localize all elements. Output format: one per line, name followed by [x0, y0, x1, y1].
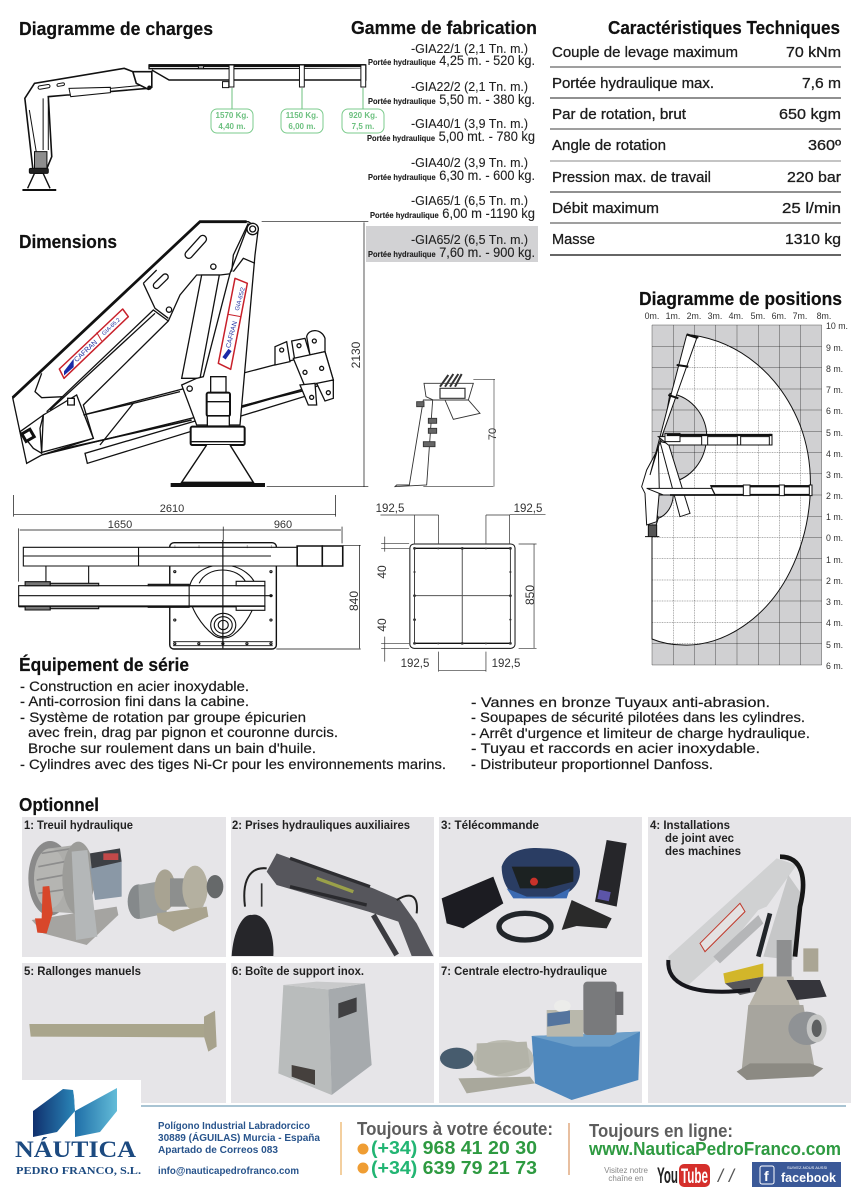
chart axis labels: [645, 311, 848, 671]
load callouts: [211, 88, 384, 133]
online block: chaîne en: [608, 1174, 644, 1183]
heading: Diagramme de positions: Diagramme de positions: [639, 288, 842, 309]
label: CAFRAN column: GIA-65/2: [235, 286, 247, 312]
facebook badge: facebook: [781, 1170, 837, 1185]
label: CAFRAN jib: [59, 309, 128, 378]
technical specs table: 1310 kg: [785, 232, 841, 248]
technical specs table: Portée hydraulique max.: [552, 76, 714, 92]
address: info@nauticapedrofranco.com: [158, 1166, 299, 1177]
chart axis labels: 5 m.: [826, 640, 843, 650]
large crane drawing: [13, 222, 368, 487]
chart grid and envelope: [645, 325, 822, 665]
range list: Gamme de fabrication: Portée hydraulique 6,30 m. - 600 kg.: [368, 167, 535, 183]
dimension labels: 192,5: [492, 658, 520, 670]
online block: Visitez notre: [604, 1166, 648, 1175]
standard equipment list left: avec frein, drag par pignon et couronne durcis.: [28, 725, 338, 740]
chart axis labels: 3m.: [708, 311, 722, 321]
crane positions: [642, 334, 812, 537]
bolt plan: [380, 514, 546, 672]
panel 7: electro-hydraulic unit: 7: Centrale electro-hydraulique: [441, 966, 607, 978]
dimension labels: [108, 428, 542, 670]
range list: Gamme de fabrication: -GIA40/1 (3,9 Tn. m.): [411, 116, 528, 131]
panel 7: electro-hydraulic unit: [439, 963, 642, 1103]
standard equipment list left: [20, 679, 446, 772]
load diagram crane: [22, 65, 384, 190]
chart axis labels: 1m.: [666, 311, 680, 321]
technical specs table: Pression max. de travail: [552, 170, 711, 186]
panel 2: auxiliary hydraulics: [231, 817, 434, 957]
standard equipment list right: - Vannes en bronze Tuyaux anti-abrasion.: [471, 695, 770, 710]
technical specs table: Angle de rotation: [552, 138, 666, 154]
photo: remote kit: [442, 840, 627, 940]
chart axis labels: 4 m.: [826, 618, 843, 628]
technical specs table: 70 kNm: [786, 45, 841, 61]
logo block: PEDRO FRANCO, S.L.: [16, 1166, 141, 1177]
range list: Gamme de fabrication: -GIA40/2 (3,9 Tn. m.): [411, 155, 528, 170]
column: [171, 223, 265, 485]
chart axis labels: 3 m.: [826, 597, 843, 607]
range list: Gamme de fabrication: -GIA22/2 (2,1 Tn. m.): [411, 79, 528, 94]
technical specs table: 7,6 m: [802, 76, 841, 92]
upper boom in plan: [23, 546, 343, 586]
photo: power unit: [440, 982, 640, 1100]
panel 4: machine installation: des machines: [665, 846, 741, 858]
range list: Gamme de fabrication: -GIA22/1 (2,1 Tn. m.): [411, 41, 528, 56]
panel 6: stainless support box: [231, 963, 434, 1103]
load callouts: 4,40 m.: [218, 122, 246, 131]
chart axis labels: 8m.: [817, 311, 831, 321]
standard equipment list left: - Construction en acier inoxydable.: [20, 679, 249, 694]
chart axis labels: 3 m.: [826, 470, 843, 480]
range list: Gamme de fabrication: -GIA65/2 (6,5 Tn. m.): [411, 232, 528, 247]
technical specs table: Couple de levage maximum: [552, 45, 738, 61]
load callouts: 920 Kg.: [349, 111, 377, 120]
panel 4: machine installation: de joint avec: [665, 833, 735, 845]
logo block: [0, 1080, 141, 1200]
heading: Diagramme de charges: Diagramme de charges: [19, 18, 213, 39]
chart axis labels: 6m.: [772, 311, 786, 321]
panel 4: machine installation: 4: Installations: [650, 820, 730, 832]
range list: Gamme de fabrication: Portée hydraulique 5,50 m. - 380 kg.: [368, 91, 535, 107]
panel 5: manual extensions: 5: Rallonges manuels: [24, 966, 141, 978]
online block: //: [716, 1166, 736, 1186]
heading: Dimensions: Dimensions: [19, 231, 117, 252]
dimension labels: 40: [375, 618, 389, 632]
photo: support box: [278, 982, 372, 1095]
logo block: NÁUTICA: [15, 1137, 136, 1162]
standard equipment list right: - Arrêt d'urgence et limiteur de charge hydraulique.: [471, 726, 810, 741]
extension boom: [42, 331, 333, 463]
dimension labels: 1650: [108, 519, 132, 531]
phone block: (+34) 968 41 20 30: [371, 1137, 537, 1158]
label: CAFRAN column: CAFRAN: [225, 320, 239, 349]
lower boom in plan: [19, 540, 273, 648]
chart axis labels: 10 m.: [826, 321, 848, 331]
chart axis labels: 0 m.: [826, 533, 843, 543]
address: 30889 (ÁGUILAS) Murcia - España: [158, 1131, 320, 1144]
standard equipment list right: - Soupapes de sécurité pilotées dans les cylindres.: [471, 710, 805, 725]
panel 1: winch: [22, 817, 226, 957]
range list: Gamme de fabrication: Portée hydraulique 4,25 m. - 520 kg.: [368, 52, 535, 68]
label: CAFRAN column: [218, 278, 247, 369]
slewing housing: [189, 565, 257, 638]
dimension labels: 192,5: [514, 503, 542, 515]
chart axis labels: 6 m.: [826, 661, 843, 671]
positions chart: [642, 325, 822, 665]
chart axis labels: 7 m.: [826, 385, 843, 395]
photo: installed crane: [668, 857, 827, 1080]
technical specs table: Débit maximum: [552, 201, 659, 217]
standard equipment list left: Broche sur roulement dans un bain d'huile.: [28, 741, 316, 756]
top view drawing: [14, 495, 546, 672]
phone block: Toujours à votre écoute:: [357, 1118, 553, 1139]
chart axis labels: 2m.: [687, 311, 701, 321]
chart axis labels: 2 m.: [826, 491, 843, 501]
range list: Gamme de fabrication: -GIA65/1 (6,5 Tn. m.): [411, 193, 528, 208]
heading: Optionnel: Optionnel: [19, 794, 99, 815]
chart axis labels: 1 m.: [826, 512, 843, 522]
dimension labels: 960: [274, 519, 292, 531]
dimension labels: 840: [347, 591, 361, 611]
standard equipment list right: - Tuyau et raccords en acier inoxydable.: [471, 741, 760, 756]
chart axis labels: 8 m.: [826, 364, 843, 374]
dimension labels: 2610: [160, 503, 184, 515]
technical specs table: Par de rotation, brut: [552, 107, 686, 123]
facebook badge: f: [764, 1168, 769, 1184]
panel 5: manual extensions: [22, 963, 226, 1103]
crane side drawing: [22, 65, 366, 190]
heading: Caractéristiques Techniques: Caractéristiques Techniques: [608, 17, 840, 38]
distributor sketch with stand: [395, 374, 495, 487]
load callouts: 7,5 m.: [352, 122, 374, 131]
address: Apartado de Correos 083: [158, 1145, 278, 1156]
load callouts: 1570 Kg.: [216, 111, 248, 120]
photo: crane arm: [232, 853, 433, 956]
chart axis labels: 4 m.: [826, 449, 843, 459]
chart axis labels: 1 m.: [826, 555, 843, 565]
load callouts: 1150 Kg.: [286, 111, 318, 120]
standard equipment list left: - Cylindres avec des tiges Ni-Cr pour les environnements marins.: [20, 757, 446, 772]
chart axis labels: 5 m.: [826, 428, 843, 438]
dimension labels: 70: [487, 428, 499, 440]
height dimension line: [262, 222, 368, 487]
standard equipment list right: - Distributeur proportionnel Danfoss.: [471, 757, 713, 772]
address: Polígono Industrial Labradorcico: [158, 1121, 310, 1132]
range list: Gamme de fabrication: Portée hydraulique 5,00 mt. - 780 kg: [367, 128, 535, 144]
panel 2: auxiliary hydraulics: 2: Prises hydrauliques auxiliaires: [232, 820, 410, 832]
technical specs table: 25 l/min: [782, 201, 841, 217]
phone block: (+34) 639 79 21 73: [371, 1157, 537, 1178]
dimension labels: 192,5: [376, 503, 404, 515]
standard equipment list left: - Anti-corrosion fini dans la cabine.: [20, 694, 249, 709]
range list: Gamme de fabrication: Portée hydraulique 7,60 m. - 900 kg.: [368, 244, 535, 260]
facebook badge: SUIVEZ-NOUS AUSSI: [787, 1165, 827, 1170]
dimension labels: 192,5: [401, 658, 429, 670]
label: CAFRAN jib: CAFRAN: [73, 339, 99, 364]
photo: winches: [28, 841, 223, 945]
facebook badge: [752, 1162, 841, 1187]
load callouts: 6,00 m.: [288, 122, 316, 131]
footer rule: [141, 1105, 846, 1107]
dividers: [340, 1122, 342, 1175]
heading: Équipement de série: Équipement de série: [19, 654, 189, 675]
panel 1: winch: 1: Treuil hydraulique: [24, 820, 133, 832]
chart axis labels: 2 m.: [826, 576, 843, 586]
dimension label 2130: 2130: [349, 341, 363, 368]
address: [158, 1121, 320, 1177]
chart axis labels: 4m.: [729, 311, 743, 321]
chart axis labels: 7m.: [793, 311, 807, 321]
technical specs table: 650 kgm: [779, 107, 841, 123]
online block: [588, 1120, 841, 1188]
standard equipment list right: [471, 695, 810, 772]
chart axis labels: 5m.: [751, 311, 765, 321]
panel 3: remote control: 3: Télécommande: [441, 820, 539, 832]
phone block: [357, 1118, 553, 1178]
range list: Gamme de fabrication: Portée hydraulique 6,00 m -1190 kg: [370, 205, 535, 221]
technical specs table: 360º: [808, 138, 842, 154]
dimension labels: 40: [375, 565, 389, 579]
online block: www.NauticaPedroFranco.com: [588, 1139, 841, 1159]
youtube badge: Tube: [681, 1165, 708, 1188]
label: CAFRAN jib: GIA-65.2: [101, 317, 122, 337]
panel 6: stainless support box: 6: Boîte de support inox.: [232, 966, 364, 978]
panel 4: machine installation: [648, 817, 851, 1103]
footer: [0, 1080, 846, 1200]
dimension labels: 850: [523, 585, 537, 605]
range list: Gamme de fabrication: [366, 41, 538, 262]
chart axis labels: 0m.: [645, 311, 659, 321]
technical specs table: [550, 45, 842, 255]
base plate: [170, 543, 276, 649]
technical specs table: Masse: [552, 232, 595, 248]
chart axis labels: 9 m.: [826, 343, 843, 353]
main jib: [13, 222, 258, 463]
online block: Toujours en ligne:: [589, 1120, 733, 1141]
heading: Gamme de fabrication: Gamme de fabrication: [351, 17, 537, 38]
technical specs table: 220 bar: [787, 170, 841, 186]
highlighted model: [366, 226, 538, 262]
chart axis labels: 6 m.: [826, 406, 843, 416]
standard equipment list left: - Système de rotation par groupe épicurien: [20, 710, 306, 725]
overall width dimension: [14, 495, 361, 649]
panel 3: remote control: [439, 817, 642, 957]
photo: extension bar: [29, 1011, 217, 1052]
youtube badge: You: [657, 1163, 678, 1188]
